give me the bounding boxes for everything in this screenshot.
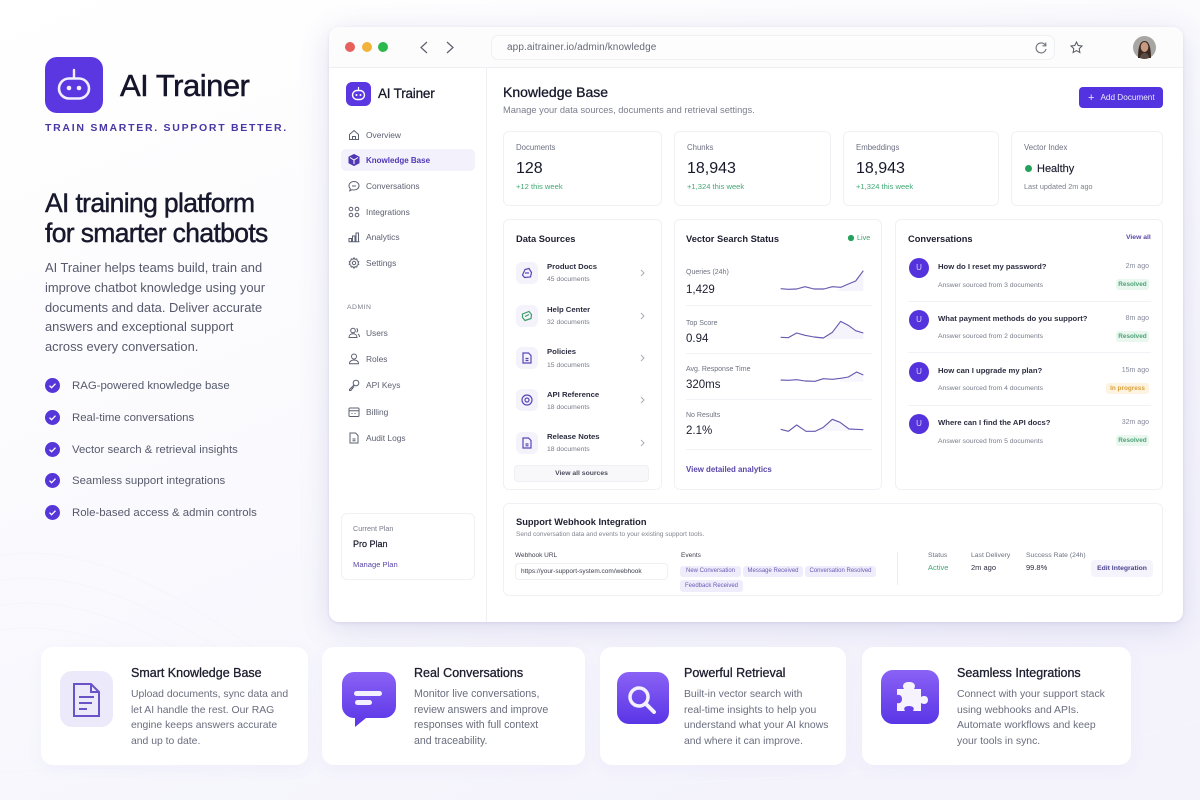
source: product docs: Product Docs <box>547 262 597 271</box>
status: Status <box>928 552 947 559</box>
item: conversations: Real-time conversations <box>72 412 194 424</box>
window controls <box>345 42 388 52</box>
description: Built-in vector search with <box>684 689 802 700</box>
icon: puzzle piece <box>881 670 939 724</box>
current plan card <box>341 513 475 580</box>
description <box>957 687 1105 749</box>
nav: knowledge base active: Knowledge Base <box>366 156 430 164</box>
chip <box>680 580 743 592</box>
metric: response time: 320ms <box>686 379 721 391</box>
analytics link: View detailed analytics <box>686 465 772 474</box>
intro paragraph <box>45 260 265 354</box>
metric: queries: 1,429 <box>686 284 715 296</box>
brand name: AI Trainer <box>120 68 249 103</box>
nav: knowledge base active <box>341 149 475 171</box>
nav: analytics: Analytics <box>366 232 400 242</box>
status <box>928 550 958 576</box>
page subtitle: Manage your data sources, documents and retrieval settings. <box>503 105 755 115</box>
success rate: Success Rate (24h) <box>1026 552 1086 559</box>
item: RAG <box>45 378 230 393</box>
view all sources button <box>514 465 649 482</box>
intro paragraph: answers and exceptional support <box>45 319 233 334</box>
change: +1,324 this week <box>687 182 744 191</box>
conversation: password: How do I reset my password? <box>938 262 1047 271</box>
item: access: Role-based access & admin controls <box>72 507 257 519</box>
intro paragraph: documents and data. Deliver accurate <box>45 300 262 315</box>
conversation: payment: Resolved <box>1118 332 1147 340</box>
stat: vector index <box>1011 131 1163 206</box>
conversation: password: 2m ago <box>1126 263 1149 270</box>
item: vector search <box>45 442 238 457</box>
metric: no results: No Results <box>686 412 720 419</box>
heading: Conversations <box>908 234 973 244</box>
source: product docs <box>516 262 644 284</box>
sidebar logo <box>346 82 371 106</box>
feature card: seamless integrations <box>862 647 1131 765</box>
plan name: Pro Plan <box>353 539 388 549</box>
brand lockup <box>45 57 288 134</box>
sidebar brand name: AI Trainer <box>378 86 435 101</box>
item: conversations <box>45 410 194 425</box>
sparklines <box>780 270 864 432</box>
source: release notes <box>516 432 644 454</box>
page title: Knowledge Base <box>503 84 608 100</box>
source: product docs: 45 documents <box>547 276 590 283</box>
description: and where it can improve. <box>684 736 803 746</box>
metric: top score: Top Score <box>686 320 718 327</box>
plan label: Current Plan <box>353 524 393 533</box>
nav: settings: Settings <box>366 258 396 268</box>
last delivery: Last Delivery <box>971 552 1010 559</box>
chip <box>743 566 803 577</box>
webhook url label: Webhook URL <box>515 552 557 559</box>
heading: Data Sources <box>516 234 575 244</box>
description: review answers and improve <box>414 704 548 716</box>
description: Upload documents, sync data and <box>131 689 288 700</box>
label: Vector Index <box>1024 143 1067 152</box>
conversation: api docs: U <box>916 419 922 428</box>
conversation: password: Resolved <box>1118 281 1147 288</box>
chip: Message Received <box>747 568 799 574</box>
description <box>684 687 828 749</box>
title: Smart Knowledge Base <box>131 666 262 680</box>
description: engine keeps answers accurate <box>131 720 277 731</box>
value: 128 <box>516 160 543 177</box>
status dot <box>1024 165 1032 172</box>
source: api reference: 18 documents <box>547 404 590 411</box>
view all link: View all <box>1126 234 1151 241</box>
icon: chat bubble <box>342 672 396 728</box>
conversation: password: Answer sourced from 3 documents <box>938 282 1043 288</box>
headline: AI training platform <box>45 188 254 218</box>
live indicator <box>848 233 870 242</box>
source: release notes: Release Notes <box>547 432 600 441</box>
metric: no results <box>686 412 720 437</box>
view all sources button: View all sources <box>555 470 608 477</box>
feature card: powerful retrieval <box>600 647 846 765</box>
conversation: api docs: Answer sourced from 5 documents <box>938 438 1043 444</box>
feature card: real conversations <box>322 647 585 765</box>
webhook url field: https://your-support-system.com/webhook <box>521 568 642 575</box>
edit integration button <box>1091 560 1153 577</box>
source: api reference: API Reference <box>547 390 599 399</box>
title: Real Conversations <box>414 666 523 680</box>
url: app.aitrainer.io/admin/knowledge <box>507 42 656 53</box>
conversation: payment: U <box>916 314 922 324</box>
conversation: payment: 8m ago <box>1126 314 1149 322</box>
source: help center <box>516 305 644 327</box>
description: Monitor live conversations, <box>414 688 539 700</box>
success rate <box>1026 550 1086 576</box>
panel: data sources <box>503 219 662 490</box>
nav: overview: Overview <box>366 130 401 140</box>
description: and traceability. <box>414 734 487 746</box>
description: understand what your AI knows <box>684 720 828 731</box>
label: Documents <box>516 143 555 152</box>
nav: billing <box>348 407 388 417</box>
description: and up to date. <box>131 736 200 746</box>
sparkline: response time <box>781 372 863 382</box>
value: 18,943 <box>856 160 905 177</box>
live indicator: Live <box>857 233 870 242</box>
item: integrations <box>45 473 225 488</box>
conversation: api docs: Resolved <box>1118 437 1147 444</box>
icon: robot logo <box>45 57 103 113</box>
conversation: upgrade: How can I upgrade my plan? <box>938 366 1042 374</box>
sparkline: no results <box>781 419 863 431</box>
description: your tools in sync. <box>957 736 1040 746</box>
intro paragraph: across every conversation. <box>45 339 198 354</box>
user avatar <box>1133 36 1156 59</box>
chip: Feedback Received <box>685 583 738 589</box>
last delivery: 2m ago <box>971 563 996 572</box>
conversation: password: U <box>916 263 922 272</box>
browser window <box>329 27 1183 622</box>
stat: chunks <box>674 131 831 206</box>
conversation: payment: What payment methods do you support? <box>938 314 1087 322</box>
change: +1,324 this week <box>856 182 913 191</box>
intro paragraph: AI Trainer helps teams build, train and <box>45 260 262 275</box>
title: Powerful Retrieval <box>684 666 785 680</box>
feature card: smart knowledge base <box>41 647 308 765</box>
webhook url field <box>515 563 668 580</box>
stat: embeddings <box>843 131 999 206</box>
manage plan link: Manage Plan <box>353 560 398 569</box>
source: policies: Policies <box>547 347 576 356</box>
last delivery <box>971 550 1016 576</box>
conversation: payment: Answer sourced from 2 documents <box>938 333 1043 340</box>
heading: Support Webhook Integration <box>516 516 646 526</box>
nav: audit logs: Audit Logs <box>366 433 406 443</box>
icon: reload <box>1036 42 1046 54</box>
source: help center: Help Center <box>547 305 590 314</box>
status: Active <box>928 563 948 572</box>
feature checklist <box>45 378 257 520</box>
chip: New Conversation <box>686 568 735 574</box>
description: responses with full context <box>414 719 538 731</box>
metric: top score <box>686 320 718 345</box>
nav: integrations: Integrations <box>366 207 410 217</box>
description: let AI handle the rest. Our RAG <box>131 704 274 716</box>
description: real-time insights to help you <box>684 704 816 716</box>
panel: vector search status <box>674 219 882 490</box>
metric: response time <box>686 366 750 391</box>
conversation: upgrade <box>909 362 1149 394</box>
source: help center: 32 documents <box>547 319 590 326</box>
chip <box>805 566 876 577</box>
description <box>131 687 288 749</box>
nav: users <box>348 328 388 338</box>
nav: settings <box>348 257 396 269</box>
nav: users: Users <box>366 328 388 338</box>
nav: api keys <box>349 380 400 391</box>
label: Embeddings <box>856 143 899 152</box>
nav: billing: Billing <box>366 407 388 417</box>
description: Send conversation data and events to your existing support tools. <box>516 531 704 538</box>
source: release notes: 18 documents <box>547 446 590 453</box>
nav: conversations <box>348 181 420 192</box>
nav: overview <box>349 130 401 140</box>
metric: queries <box>686 268 729 296</box>
conversation: upgrade: U <box>916 366 922 376</box>
heading: Vector Search Status <box>686 234 779 244</box>
metric: queries: Queries (24h) <box>686 269 729 276</box>
intro paragraph: improve chatbot knowledge using your <box>45 280 265 295</box>
description <box>414 687 548 749</box>
source: policies: 15 documents <box>547 362 590 369</box>
description: Connect with your support stack <box>957 689 1105 700</box>
title: Seamless Integrations <box>957 666 1081 680</box>
nav: conversations: Conversations <box>366 181 420 191</box>
add document button: + Add Document <box>1088 92 1155 104</box>
value: 18,943 <box>687 160 736 177</box>
chip: Conversation Resolved <box>809 568 872 574</box>
item: RAG: RAG-powered knowledge base <box>72 380 230 392</box>
source: api reference <box>516 389 644 411</box>
icon: star <box>1070 41 1083 54</box>
metric: response time: Avg. Response Time <box>686 366 750 373</box>
nav: roles: Roles <box>366 354 387 364</box>
address bar <box>491 35 1055 60</box>
edit integration button: Edit Integration <box>1097 565 1147 572</box>
conversation: api docs: 32m ago <box>1122 419 1149 426</box>
icon: magnifier <box>617 672 669 724</box>
nav: audit logs <box>350 432 406 444</box>
description: using webhooks and APIs. <box>957 704 1079 716</box>
icon: document <box>60 671 113 727</box>
tagline: TRAIN SMARTER. SUPPORT BETTER. <box>45 122 288 134</box>
conversation: payment <box>909 310 1149 342</box>
back and forward arrows <box>420 42 454 54</box>
stat: documents <box>503 131 662 206</box>
conversation: upgrade: 15m ago <box>1122 366 1149 374</box>
description: Automate workflows and keep <box>957 720 1096 731</box>
last updated: Last updated 2m ago <box>1024 182 1093 191</box>
sparkline: queries <box>781 271 863 291</box>
nav: analytics <box>348 232 400 242</box>
sidebar <box>330 68 487 622</box>
headline <box>44 188 268 248</box>
nav: roles <box>349 354 388 364</box>
conversation: password <box>909 258 1149 290</box>
headline: for smarter chatbots <box>45 218 268 248</box>
nav: integrations <box>348 206 410 218</box>
add document button <box>1079 87 1163 108</box>
nav: api keys: API Keys <box>366 380 400 390</box>
panel: webhook integration <box>503 503 1163 596</box>
chip <box>680 566 741 577</box>
admin section label: ADMIN <box>347 304 371 311</box>
browser toolbar <box>329 27 1183 68</box>
conversation: api docs: Where can I find the API docs? <box>938 418 1050 427</box>
item: vector search: Vector search & retrieval insights <box>72 444 238 456</box>
metric: top score: 0.94 <box>686 333 708 345</box>
events label: Events <box>681 552 701 559</box>
conversation: api docs <box>908 417 1151 449</box>
event chips <box>680 566 880 593</box>
item: integrations: Seamless support integrations <box>72 475 225 487</box>
item: access <box>45 505 257 520</box>
panel: conversations <box>895 219 1163 490</box>
sparkline: top score <box>781 321 863 339</box>
success rate: 99.8% <box>1026 563 1047 572</box>
conversation: upgrade: In progress <box>1110 384 1145 392</box>
metric: no results: 2.1% <box>686 425 712 437</box>
change: +12 this week <box>516 182 563 191</box>
source: policies <box>516 347 644 369</box>
conversation: upgrade: Answer sourced from 4 documents <box>938 385 1043 392</box>
label: Chunks <box>687 143 713 152</box>
status: Healthy <box>1037 162 1074 174</box>
